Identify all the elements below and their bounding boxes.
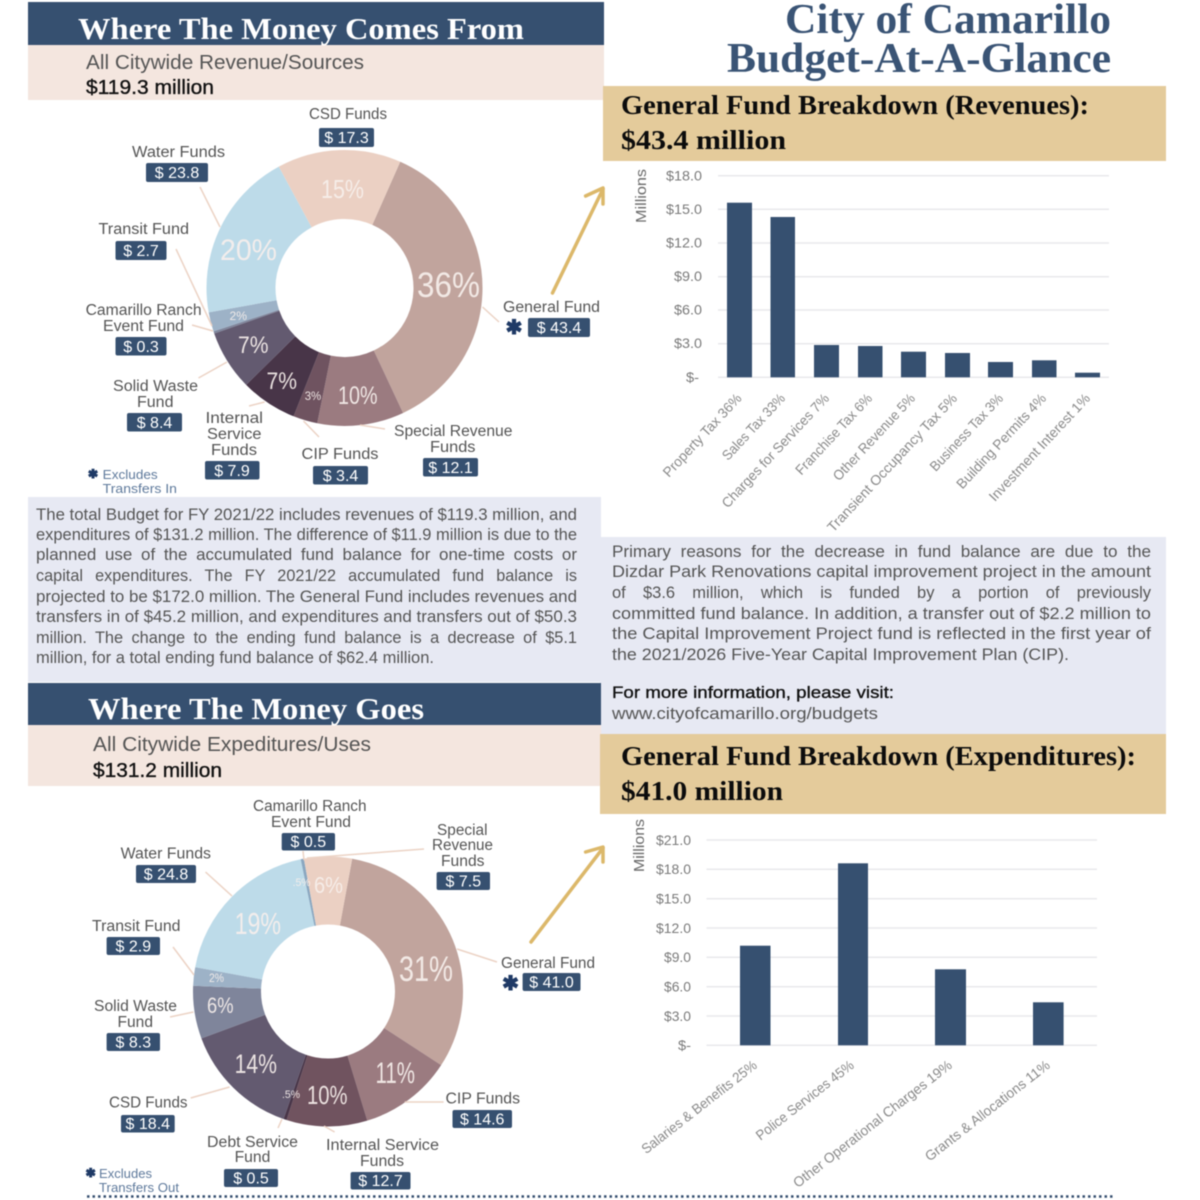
category labels: Sales Tax 33% xyxy=(719,390,788,463)
donut percentages: expenditures: 6% xyxy=(314,872,343,898)
label: General Fund expenditures: $ 41.0 xyxy=(529,974,574,992)
leader lines: expenditures donut xyxy=(170,849,497,1132)
footnote: excludes transfers out: Transfers Out xyxy=(99,1180,179,1195)
label: CSD Funds: CSD Funds xyxy=(309,106,387,123)
label: Camarillo Ranch Event Fund xyxy=(253,798,366,851)
total revenue: $119.3 million xyxy=(86,77,214,99)
label: Solid Waste Fund: $ 8.4 xyxy=(137,415,172,432)
panel: where the money goes header xyxy=(28,683,601,786)
label: Water Funds xyxy=(121,846,211,884)
donut percentages: expenditures: .5% xyxy=(293,877,311,889)
y axis labels: $- xyxy=(678,1038,691,1053)
label: Solid Waste Fund xyxy=(94,998,177,1052)
y axis labels: $18.0 xyxy=(666,168,702,184)
label: Camarillo Ranch Event Fund: $ 0.5 xyxy=(291,834,326,851)
label: Water Funds: Water Funds xyxy=(132,144,225,161)
y axis labels: $9.0 xyxy=(664,950,691,965)
label: Internal Service Funds: $ 12.7 xyxy=(358,1173,403,1190)
y axis labels xyxy=(666,168,702,385)
donut percentages: revenue sources: 20% xyxy=(220,234,277,267)
donut percentages: expenditures: .5% xyxy=(282,1089,300,1101)
label: Solid Waste Fund: Solid Waste xyxy=(113,378,198,395)
label: Debt Service Fund: $ 0.5 xyxy=(233,1170,269,1188)
text panel: total budget summary: million, for a total ending fund balance of $62.4 million. xyxy=(36,648,434,667)
label: Internal Service Funds: Funds xyxy=(360,1153,404,1170)
donut percentages: expenditures: 2% xyxy=(209,971,224,985)
category labels: Other Operational Charges 19% xyxy=(790,1057,955,1191)
bars xyxy=(740,863,1064,1045)
label: Special Revenue Funds: $ 12.1 xyxy=(428,460,473,477)
donut percentages: revenue sources: 36% xyxy=(417,266,480,305)
label: Transit Fund xyxy=(98,221,189,260)
label: Solid Waste Fund: $ 8.3 xyxy=(116,1034,151,1052)
y axis labels: $21.0 xyxy=(656,833,691,848)
label: Water Funds: Water Funds xyxy=(121,846,211,862)
category labels: Charges for Services 7% xyxy=(718,390,832,511)
label: Transit Fund xyxy=(92,918,180,956)
label: Solid Waste Fund: Fund xyxy=(137,394,174,411)
label: CIP Funds xyxy=(446,1090,520,1128)
label: CIP Funds: $ 14.6 xyxy=(460,1112,505,1128)
footnote: excludes transfers in: Excludes xyxy=(103,467,158,482)
label: Camarillo Ranch Event Fund xyxy=(86,302,202,356)
bars xyxy=(727,203,1100,377)
label: Internal Service Funds: Internal Service xyxy=(326,1137,439,1154)
category labels: Transient Occupancy Tax 5% xyxy=(824,390,960,535)
panel: general fund revenues header xyxy=(603,86,1166,161)
label: Special Revenue Funds: Revenue xyxy=(432,837,493,854)
y axis labels: $12.0 xyxy=(656,921,691,936)
donut percentages: expenditures: 19% xyxy=(235,906,281,941)
text panel: total budget summary: transfers in of $45.2 million, and expenditures and transfers out of $50.3 xyxy=(36,607,577,626)
heading: where the money comes from: Where The Money Comes From xyxy=(78,11,524,46)
label: Special Revenue Funds: Special Revenue xyxy=(394,423,512,440)
text panel: total budget summary xyxy=(28,497,601,682)
bar chart: general fund expenditures xyxy=(632,819,1097,1191)
leader lines: revenue donut xyxy=(176,187,499,437)
donut percentages: expenditures xyxy=(207,872,453,1110)
text panel: fund balance reasons and more information xyxy=(600,537,1166,735)
label: General Fund expenditures: ✱ xyxy=(502,971,519,995)
y axis labels: $6.0 xyxy=(674,302,702,318)
page title xyxy=(727,0,1111,82)
label: Camarillo Ranch Event Fund: $ 0.3 xyxy=(123,339,159,356)
text panel: fund balance reasons and more information: Primary reasons for the decrease in fund balance are due to the xyxy=(612,542,1151,561)
category labels: Other Revenue 5% xyxy=(829,390,918,484)
label: CIP Funds: CIP Funds xyxy=(446,1090,520,1108)
donut percentages: revenue sources: 2% xyxy=(230,309,247,323)
page title: Budget-At-A-Glance xyxy=(727,36,1111,82)
total expenditures: $131.2 million xyxy=(93,760,222,782)
donut percentages: expenditures: 10% xyxy=(307,1080,348,1110)
label: Camarillo Ranch Event Fund: Event Fund xyxy=(103,318,184,335)
text panel: total budget summary: expenditures of $131.2 million. The difference of $11.9 million is due to the xyxy=(36,525,577,544)
subheading: expenditures: All Citywide Expeditures/Uses xyxy=(93,734,371,756)
donut percentages: expenditures: 14% xyxy=(235,1049,277,1079)
category labels: Police Services 45% xyxy=(752,1057,857,1143)
label: Special Revenue Funds xyxy=(394,423,512,477)
text panel: total budget summary: planned use of the accumulated fund balance for one-time costs or xyxy=(36,545,577,564)
y axis labels xyxy=(656,833,691,1053)
label: Internal Service Funds: Service xyxy=(207,426,262,443)
panel: general fund expenditures header xyxy=(600,734,1166,814)
label: General Fund expenditures xyxy=(501,955,595,995)
donut percentages: revenue sources: 3% xyxy=(305,389,322,403)
donut percentages: revenue sources: 7% xyxy=(266,368,297,395)
donut percentages: revenue sources: 10% xyxy=(338,382,378,410)
label: Solid Waste Fund xyxy=(113,378,198,432)
text panel: total budget summary: The total Budget for FY 2021/22 includes revenues of $119.3 million, and xyxy=(36,505,577,524)
text panel: fund balance reasons and more information: www.cityofcamarillo.org/budgets xyxy=(611,704,878,723)
panel: general fund expenditures header: $41.0 million xyxy=(621,776,783,806)
y axis labels: $12.0 xyxy=(666,236,702,250)
arrow: expenditures donut to bar chart xyxy=(531,847,603,942)
label: Transit Fund: Transit Fund xyxy=(92,918,180,935)
category labels: Investment Interest 1% xyxy=(985,390,1093,504)
donut percentages: expenditures: 31% xyxy=(399,950,453,989)
label: CSD Funds xyxy=(109,1094,188,1133)
label: General Fund revenues: General Fund xyxy=(503,299,600,316)
label: Camarillo Ranch Event Fund: Camarillo Ranch xyxy=(86,302,202,319)
label: CSD Funds: $ 18.4 xyxy=(126,1116,170,1133)
label: Special Revenue Funds: Funds xyxy=(430,439,476,456)
label: Solid Waste Fund: Fund xyxy=(118,1014,153,1031)
label: CSD Funds xyxy=(309,106,387,147)
label: General Fund revenues: $ 43.4 xyxy=(537,320,581,337)
label: General Fund revenues xyxy=(503,299,600,339)
label: CIP Funds xyxy=(302,446,379,485)
label: Internal Service Funds: Internal xyxy=(206,410,263,427)
subheading: revenue sources: All Citywide Revenue/Sources xyxy=(86,52,364,74)
text panel: fund balance reasons and more information: the Capital Improvement Project fund is reflected in the first year of xyxy=(612,624,1151,643)
label: Internal Service Funds: Funds xyxy=(211,442,257,459)
label: Transit Fund: $ 2.9 xyxy=(116,938,151,956)
label: Special Revenue Funds: $ 7.5 xyxy=(446,874,481,890)
panel: general fund revenues header: General Fund Breakdown (Revenues): xyxy=(621,90,1089,120)
arrow: revenue donut to bar chart xyxy=(552,188,603,293)
label: Special Revenue Funds: Funds xyxy=(441,853,485,870)
label: Internal Service Funds xyxy=(326,1137,439,1190)
label: Solid Waste Fund: Solid Waste xyxy=(94,998,177,1015)
donut percentages: expenditures: 6% xyxy=(207,993,234,1018)
label: Water Funds: $ 23.8 xyxy=(155,165,199,182)
category labels: Building Permits 4% xyxy=(953,390,1049,492)
label: Internal Service Funds xyxy=(205,410,263,480)
label: Debt Service Fund xyxy=(207,1134,298,1188)
donut percentages: revenue sources xyxy=(220,174,480,410)
category labels xyxy=(659,390,1093,535)
y axis labels: $9.0 xyxy=(674,269,702,284)
label: Water Funds xyxy=(132,144,225,182)
category labels: Franchise Tax 6% xyxy=(792,390,875,478)
label: CIP Funds: $ 3.4 xyxy=(323,468,358,485)
category labels: Salaries & Benefits 25% xyxy=(638,1057,760,1157)
footnote: excludes transfers out: ✱ xyxy=(86,1166,96,1180)
footnote: excludes transfers in: Transfers In xyxy=(103,481,177,496)
text panel: total budget summary: projected to be $172.0 million. The General Fund includes revenues and xyxy=(36,587,577,606)
label: Debt Service Fund: Debt Service xyxy=(207,1134,298,1151)
text panel: fund balance reasons and more information: of $3.6 million, which is funded by a portion of previously xyxy=(612,583,1151,602)
label: Water Funds: $ 24.8 xyxy=(144,866,188,884)
text panel: fund balance reasons and more information: For more information, please visit: xyxy=(612,683,894,702)
footnote: excludes transfers out xyxy=(86,1166,179,1195)
y axis labels: $3.0 xyxy=(664,1009,691,1024)
label: Camarillo Ranch Event Fund: Event Fund xyxy=(271,814,351,831)
bar chart: general fund revenues xyxy=(634,168,1109,535)
label: Special Revenue Funds xyxy=(432,822,493,890)
category labels xyxy=(638,1057,1053,1191)
text panel: total budget summary: million. The change to the ending fund balance is a decrease of $5.1 xyxy=(36,628,577,647)
text panel: fund balance reasons and more information: committed fund balance. In addition, a transfer out of $2.2 million to xyxy=(612,604,1151,623)
footnote: excludes transfers in: ✱ xyxy=(88,467,98,481)
donut chart: expenditures xyxy=(210,874,446,1109)
panel: general fund expenditures header: General Fund Breakdown (Expenditures): xyxy=(621,741,1136,771)
label: Camarillo Ranch Event Fund: Camarillo Ranch xyxy=(253,798,366,815)
label: General Fund revenues: ✱ xyxy=(506,315,522,339)
label: Special Revenue Funds: Special xyxy=(437,822,488,839)
y axis labels: $15.0 xyxy=(666,202,702,217)
category labels: Grants & Allocations 11% xyxy=(922,1057,1053,1164)
panel: where the money comes from header xyxy=(28,2,604,100)
y axis labels: $18.0 xyxy=(656,862,691,877)
y axis labels: $3.0 xyxy=(674,336,702,351)
label: CSD Funds: $ 17.3 xyxy=(324,130,369,147)
label: Transit Fund: Transit Fund xyxy=(98,221,189,238)
panel: general fund revenues header: $43.4 million xyxy=(621,125,786,155)
donut percentages: revenue sources: 7% xyxy=(238,332,268,359)
label: General Fund expenditures: General Fund xyxy=(501,955,595,972)
y axis labels: $- xyxy=(686,370,699,385)
label: Debt Service Fund: Fund xyxy=(235,1149,270,1166)
donut percentages: expenditures: 11% xyxy=(376,1057,415,1090)
text panel: total budget summary: capital expenditures. The FY 2021/22 accumulated fund balance is xyxy=(36,566,577,585)
label: CSD Funds: CSD Funds xyxy=(109,1094,188,1112)
text panel: fund balance reasons and more information: Dizdar Park Renovations capital improvement project in the amount xyxy=(612,562,1151,581)
text panel: fund balance reasons and more information: the 2021/2026 Five-Year Capital Improvement Plan (CIP). xyxy=(612,645,1069,664)
donut percentages: revenue sources: 15% xyxy=(321,174,364,204)
heading: where the money goes: Where The Money Goes xyxy=(88,691,424,726)
footnote: excludes transfers out: Excludes xyxy=(99,1166,153,1181)
category labels: Business Tax 3% xyxy=(926,390,1006,474)
axis title: millions: Millions xyxy=(634,169,650,223)
category labels: Property Tax 36% xyxy=(659,390,745,480)
footnote: excludes transfers in xyxy=(88,467,177,496)
label: CIP Funds: CIP Funds xyxy=(302,446,379,463)
label: Internal Service Funds: $ 7.9 xyxy=(214,463,250,480)
label: Transit Fund: $ 2.7 xyxy=(123,243,159,260)
y axis labels: $6.0 xyxy=(664,980,691,994)
y axis labels: $15.0 xyxy=(656,892,691,906)
donut chart: revenue sources xyxy=(208,151,481,425)
axis title: millions: Millions xyxy=(632,819,648,872)
